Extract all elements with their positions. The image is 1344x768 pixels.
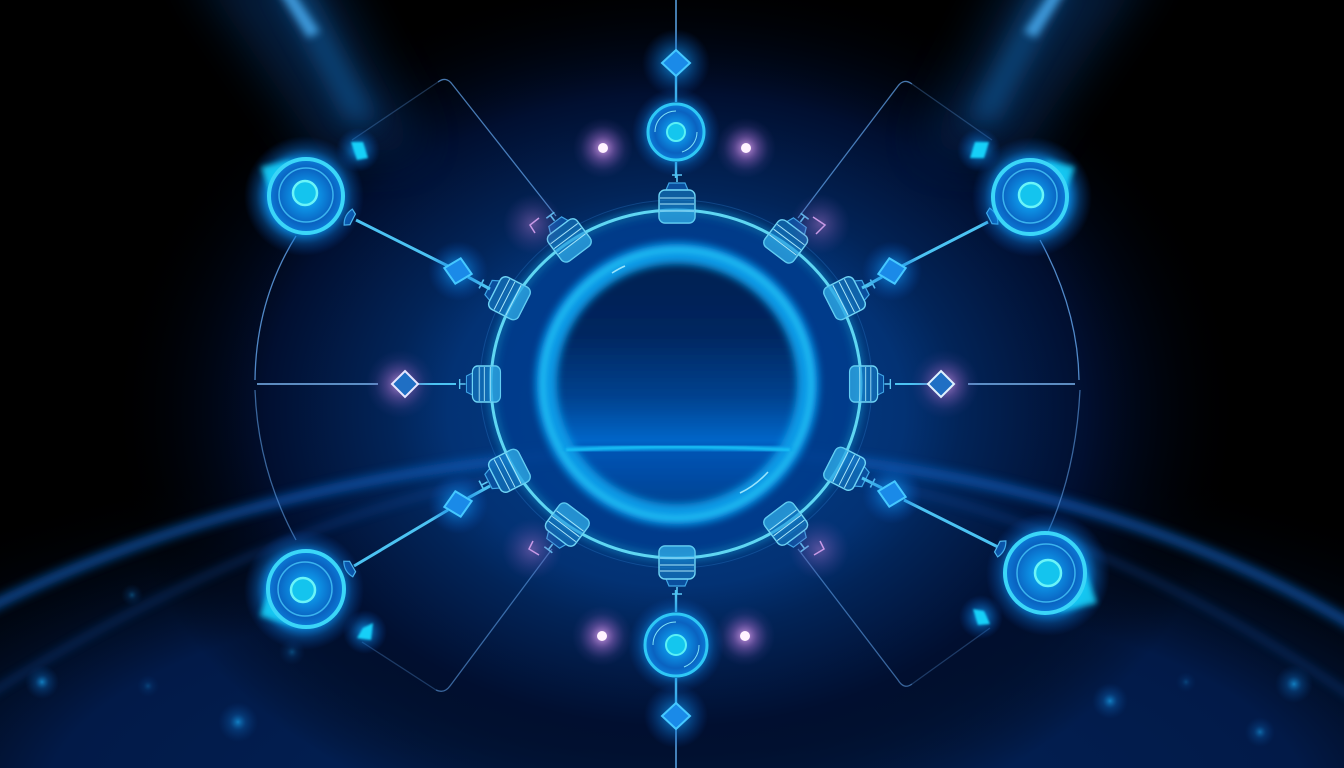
central sphere [535,242,819,526]
horizon arcs [0,450,1344,705]
outer ring [480,200,872,568]
node: bottom left [244,530,364,650]
thin sector outlines [255,0,1080,768]
node: top left [244,136,364,256]
node: top right [972,137,1092,257]
node: top [632,88,720,176]
spoke lines [354,76,1000,704]
ring interior glow [493,212,859,556]
pink glowing dots [572,118,776,666]
node: bottom right [986,512,1110,636]
ring connectors [460,175,890,594]
side diamonds with pink glow [366,350,979,418]
bokeh particles [25,584,1313,747]
node: bottom [628,597,724,693]
pink chevrons [502,194,850,579]
light beams from top corners [190,0,1154,150]
diamond markers [428,29,922,748]
spoke end caps [342,207,1008,578]
small corner diamonds [336,128,1003,654]
